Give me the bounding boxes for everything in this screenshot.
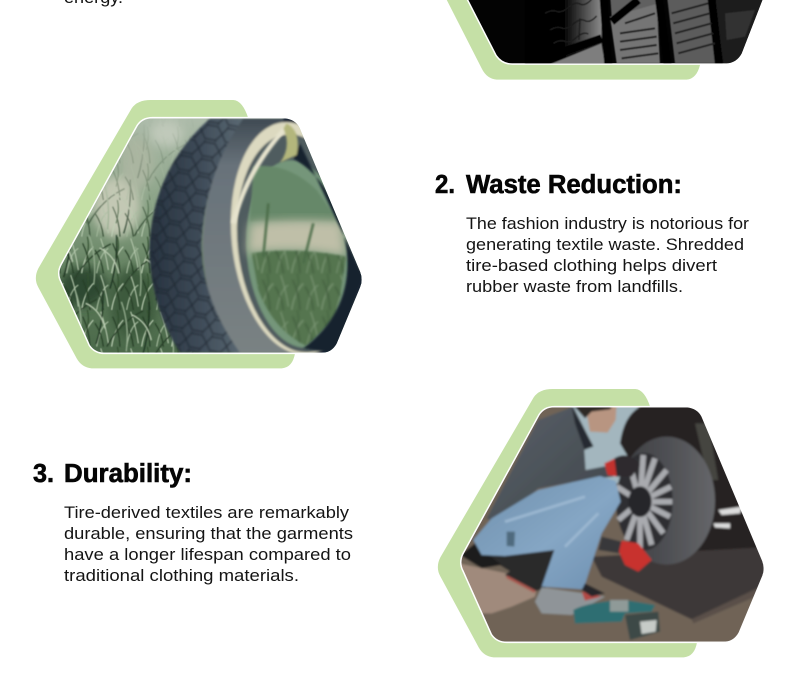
- cordless drill and battery: [573, 600, 655, 623]
- panel: mechanic changing a tire photo: [438, 389, 778, 657]
- dark wedge on the right: [293, 143, 363, 353]
- panel: tire in the grass photo: [36, 100, 370, 368]
- lower arm and red glove: [598, 537, 622, 553]
- green backing hexagon: [438, 389, 697, 657]
- text block: durability: traditional clothing materials.: [64, 566, 299, 585]
- text block: durability: durable, ensuring that the garments: [64, 524, 353, 543]
- green backing hexagon: [442, 0, 700, 80]
- text block: waste reduction: [466, 214, 749, 296]
- text block: durability: Tire-derived textiles are remarkably: [64, 503, 350, 522]
- tire: [631, 436, 716, 565]
- sidewall: [202, 118, 293, 352]
- panel: tire tread photo: [442, 0, 772, 80]
- wall: [572, 403, 638, 483]
- white photo border: [465, 0, 765, 63]
- heading: 2. Waste Reduction: Waste Reduction:: [466, 171, 682, 199]
- ramp mat: [592, 547, 775, 619]
- text block: waste reduction: tire-based clothing helps divert: [466, 256, 717, 275]
- scenery inside the tire hole: [247, 166, 346, 346]
- photo: tire tread blocks: [468, 0, 762, 64]
- jeans: [473, 476, 621, 589]
- text block: waste reduction: The fashion industry is notorious for: [466, 214, 749, 233]
- text block: durability: have a longer lifespan compared to: [64, 545, 351, 564]
- text block: durability: [64, 503, 353, 585]
- jacket: [487, 407, 613, 523]
- front shoe: [535, 587, 605, 615]
- tread: [149, 118, 243, 353]
- white photo border: [461, 407, 764, 642]
- green backing hexagon: [36, 100, 295, 368]
- wheel arch and suspension: [618, 408, 757, 552]
- gloves: [604, 458, 617, 477]
- view through the tire: [245, 159, 348, 349]
- dark far side of the tire: [283, 117, 367, 355]
- heading: 3. Durability: Durability:: [64, 460, 192, 488]
- cream rim: [229, 120, 360, 353]
- head: [586, 408, 618, 434]
- rope: [280, 123, 298, 163]
- photo: mechanic at wheel: [462, 407, 764, 642]
- rim highlight at the top: [233, 127, 287, 223]
- white photo border: [59, 118, 362, 353]
- text block: waste reduction: generating textile waste. Shredded: [466, 235, 744, 254]
- back shoe: [504, 570, 542, 592]
- heading: 2. Waste Reduction: 2.: [435, 171, 455, 199]
- photo: tire swing in grass: [53, 116, 370, 361]
- floor left patch: [458, 563, 538, 613]
- heading: 3. Durability: 3.: [33, 460, 54, 488]
- text block: waste reduction: rubber waste from landfills.: [466, 277, 683, 296]
- shadow under the thigh: [490, 550, 554, 572]
- alloy rim and spokes: [616, 453, 673, 550]
